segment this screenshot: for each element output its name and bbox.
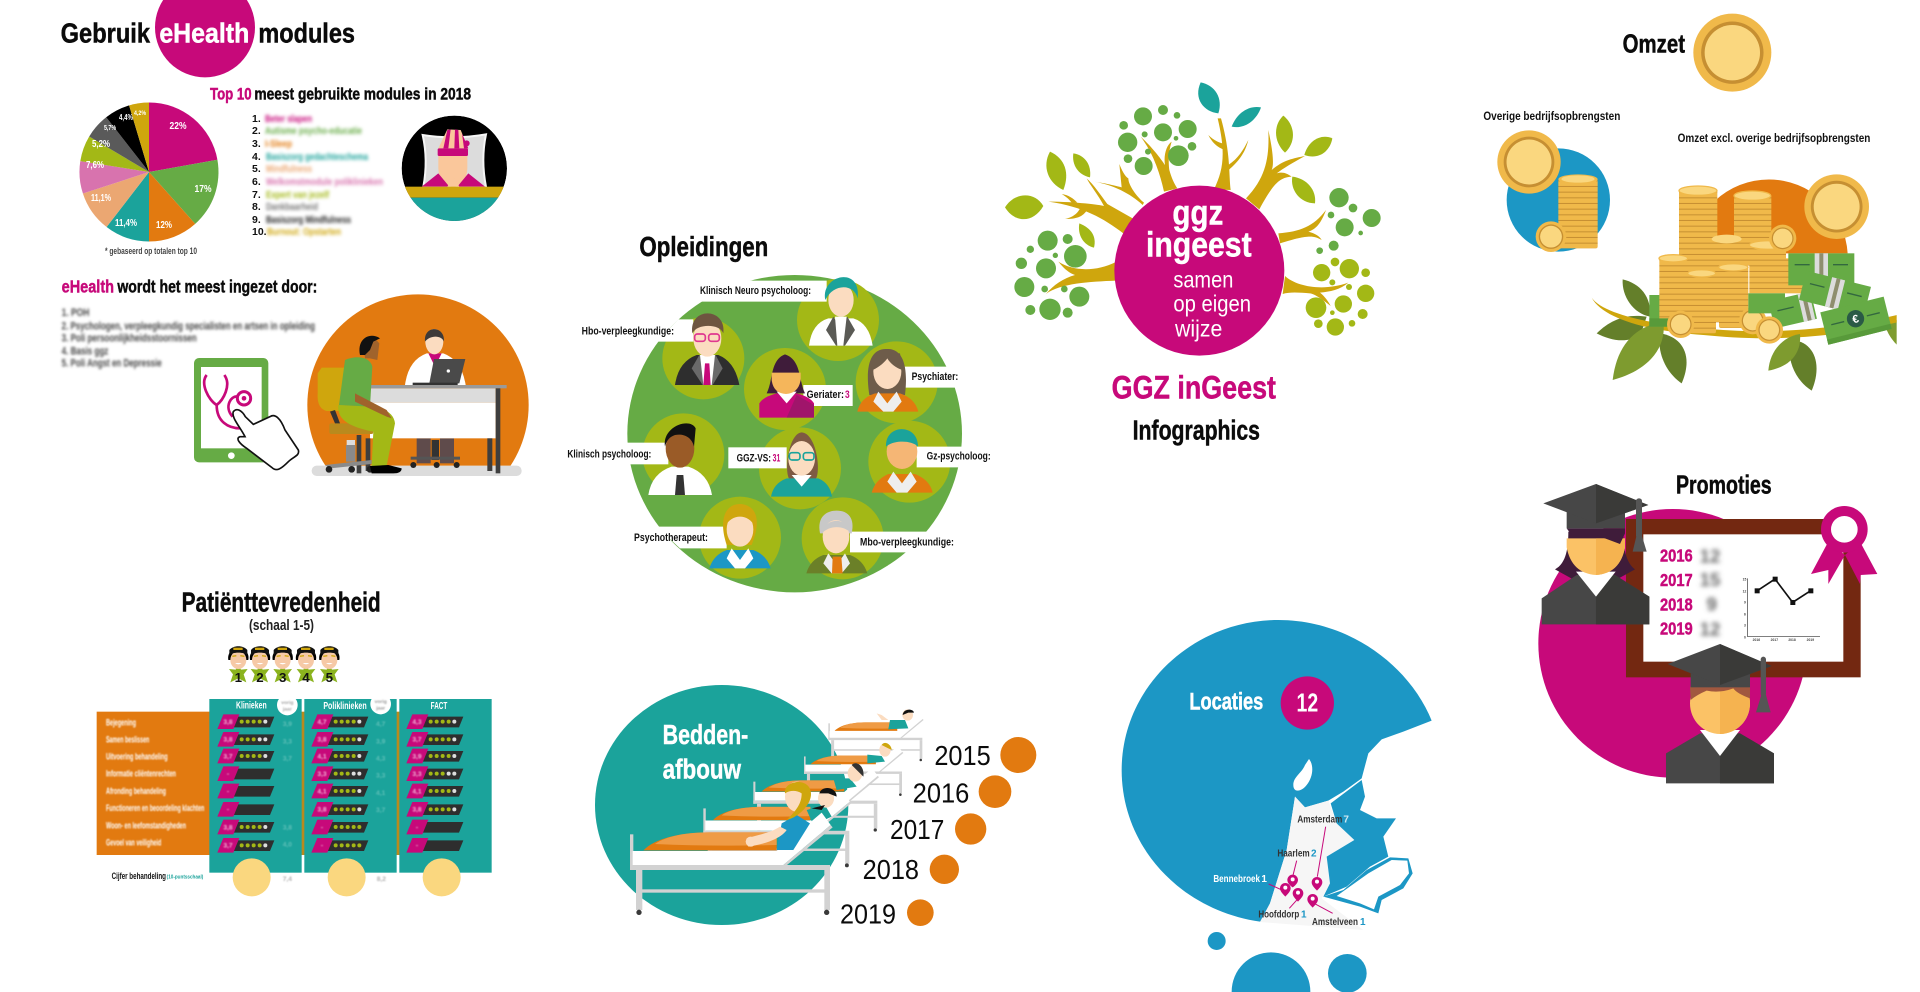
logo text: wijze: [1174, 316, 1222, 342]
panel: GGZ inGeest logo: [1005, 82, 1381, 445]
location labels: Haarlem: [1277, 848, 1310, 859]
line chart: 9: [1744, 601, 1746, 605]
smiley scale: 1: [235, 670, 243, 685]
big green circle: [627, 275, 962, 592]
blue circle: [1122, 620, 1432, 922]
map: [1260, 717, 1447, 935]
illustration: doctor and patient: [307, 294, 529, 476]
panel: eHealth usage: [60, 279, 529, 476]
logo text: samen: [1173, 266, 1233, 292]
label: cijfer behandeling: (10-puntsschaal): [167, 875, 203, 881]
row labels: Gevoel van veiligheid: [106, 837, 161, 847]
column: Poliklinieken: jaar: [375, 705, 385, 711]
list: top 10 modules: Welkomstmodule poliklinieken: [266, 176, 383, 188]
column: Poliklinieken: 3,7: [376, 807, 386, 814]
dots: [1014, 105, 1381, 320]
leaves: [1005, 116, 1332, 248]
person: psychiater: [857, 349, 918, 412]
smiley scale: 4: [302, 670, 310, 685]
title: Omzet: Omzet: [1623, 29, 1685, 59]
logo text: [1146, 193, 1252, 342]
column: FACT: -: [416, 843, 418, 850]
board: [1626, 519, 1861, 677]
column: Klinieken: 3,8: [223, 824, 233, 831]
year scale: [840, 737, 1036, 929]
smiley scale: [228, 646, 340, 685]
teal circle: [595, 685, 848, 925]
list: top 10 modules: Expert van jezelf: [266, 189, 329, 201]
title: Gebruik eHealth modules: [61, 18, 355, 49]
illustration: coins and money on branch: €: [1851, 313, 1861, 326]
list: top 10 modules: I-Sleep: [265, 138, 292, 150]
column: Klinieken: 3,8: [283, 824, 292, 831]
year scale: 2015: [934, 740, 991, 771]
column: Klinieken: 3,8: [223, 719, 233, 726]
subtitle: top 10: meest gebruikte modules in 2018: [254, 84, 471, 103]
title: Bedden-afbouw: Bedden-: [663, 719, 748, 750]
line chart: 3: [1744, 624, 1746, 628]
labels: Klinisch psycholoog:: [567, 448, 651, 460]
pie chart: top 10 modules: 22%: [170, 120, 187, 132]
year list: 2018: [1660, 595, 1693, 615]
location labels: Bennebroek: [1213, 874, 1260, 885]
count badge: [1281, 676, 1334, 730]
line chart: [1743, 577, 1820, 642]
panel: Promoties: [1538, 469, 1877, 783]
column: Klinieken: [209, 695, 302, 873]
list: departments: 5. Poli Angst en Depressie: [62, 358, 162, 370]
count badge: 12: [1296, 687, 1318, 717]
list: top 10 modules: 4.: [252, 151, 261, 163]
year list: 2016: [1660, 546, 1693, 566]
person: gz-psycholoog: [872, 429, 933, 493]
list: departments: 1. POH: [62, 307, 89, 319]
column: Klinieken: -: [227, 771, 229, 778]
column: Klinieken: 3,7: [223, 753, 233, 760]
title: Bedden-afbouw: [663, 719, 748, 784]
rosette: [1811, 506, 1877, 584]
column: Poliklinieken: -: [321, 824, 323, 831]
illustration: coins and money on branch: [1592, 174, 1903, 391]
column: Poliklinieken: 4,1: [317, 788, 327, 795]
graduate: woman: [1542, 484, 1649, 624]
row labels: Samen beslissen: [106, 734, 149, 744]
column: FACT: 4,1: [412, 788, 422, 795]
list: top 10 modules: Mindfulness: [266, 163, 312, 175]
column: FACT: 3,7: [412, 737, 422, 744]
column: Poliklinieken: 4,1: [376, 790, 386, 797]
labels: Hbo-verpleegkundige:: [582, 325, 674, 337]
labels: Psychiater:: [912, 371, 958, 383]
list: top 10 modules: 7.: [252, 189, 261, 201]
year scale: 2016: [913, 777, 969, 808]
column: Klinieken: jaar: [282, 706, 292, 712]
column: Poliklinieken: 4,3: [376, 755, 386, 762]
column: Poliklinieken: [304, 694, 397, 873]
blurred numbers: 12: [1700, 618, 1720, 639]
list: departments: [62, 307, 315, 370]
panel: Opleidingen: [567, 231, 991, 592]
graduate: man: [1666, 644, 1774, 783]
list: top 10 modules: 1.: [252, 113, 261, 125]
column: FACT: 4,3: [412, 719, 422, 726]
pie chart: top 10 modules: 11,4%: [115, 217, 137, 229]
column: Klinieken: vorig: [281, 700, 293, 706]
pie chart: top 10 modules: 5,7%: [104, 125, 117, 132]
location labels: 7: [1343, 815, 1349, 826]
location pins: [1280, 875, 1322, 908]
year list: 2019: [1660, 619, 1693, 639]
column: FACT: -: [416, 824, 418, 831]
column: FACT: 3,3: [412, 771, 422, 778]
column: Poliklinieken: 3,9: [376, 738, 386, 745]
panel: Omzet: [1483, 14, 1903, 391]
line chart: 6: [1744, 612, 1746, 616]
pie chart: top 10 modules: [79, 102, 218, 241]
column: Poliklinieken: 3,3: [376, 773, 386, 780]
label: omzet excl.: Omzet excl. overige bedrijfsopbrengsten: [1678, 131, 1870, 145]
column: Klinieken: -: [227, 788, 229, 795]
subtitle: top 10: Top 10: [210, 84, 252, 103]
list: top 10 modules: 5.: [252, 163, 261, 175]
title: Bedden-afbouw: afbouw: [663, 753, 741, 784]
labels: Psychotherapeut:: [634, 532, 708, 544]
column: FACT: FACT: [431, 701, 447, 712]
title: Promoties: Promoties: [1676, 469, 1772, 499]
logo text: ingeest: [1146, 226, 1252, 265]
panel: Locaties: [1122, 620, 1447, 992]
column: Poliklinieken: 4,1: [317, 753, 327, 760]
labels: Geriater:: [807, 389, 844, 401]
logo text: ggz: [1172, 193, 1223, 232]
list: top 10 modules: 9.: [252, 214, 261, 226]
column: Klinieken: 3,8: [223, 737, 233, 744]
location labels: [1213, 815, 1366, 928]
column: Klinieken: 4,0: [283, 842, 292, 849]
label: cijfer behandeling: Cijfer behandeling: [112, 871, 166, 881]
row labels: Bejegening: [106, 717, 136, 727]
row labels: Functioneren en beoordeling klachten: [106, 803, 204, 813]
year list: 2017: [1660, 570, 1693, 590]
column: Poliklinieken: 3,3: [317, 771, 327, 778]
column: Klinieken: Klinieken: [236, 700, 267, 711]
column: Poliklinieken: 4,7: [317, 719, 327, 726]
title: Locaties: Locaties: [1189, 688, 1263, 715]
pie chart: top 10 modules: 11,1%: [91, 192, 111, 204]
location labels: 2: [1311, 848, 1317, 859]
person: klinisch psycholoog: [648, 423, 712, 495]
labels: 31: [773, 452, 780, 464]
title circle: [155, 0, 255, 77]
column: Klinieken: 3,3: [283, 738, 292, 745]
list: top 10 modules: Beter slapen: [265, 113, 312, 125]
lime circles: [642, 279, 950, 579]
list: top 10 modules: 6.: [252, 176, 261, 188]
person: hbo-verpleegkundige: [675, 313, 739, 385]
previous year scores: [283, 876, 386, 883]
location labels: Amsterdam: [1297, 815, 1342, 826]
title: Opleidingen: Opleidingen: [639, 231, 768, 262]
connector lines: [1269, 827, 1333, 913]
column: Poliklinieken: 4,7: [376, 721, 386, 728]
year list: [1660, 546, 1693, 639]
magenta circle: [1538, 509, 1807, 778]
pie chart: top 10 modules: 5,2%: [92, 138, 110, 150]
white label bands: [570, 281, 963, 552]
line chart: 12: [1743, 589, 1747, 593]
list: top 10 modules: Burnout: Opstarten: [267, 226, 341, 238]
line chart: 2019: [1807, 638, 1814, 642]
decorative dots: [1208, 932, 1367, 992]
score circles: [233, 858, 461, 896]
tree branches: [1046, 118, 1348, 306]
panel: Patiënttevredenheid: [97, 587, 492, 896]
panel: eHealth modules: [61, 0, 471, 103]
title: Gebruik eHealth modules: modules: [258, 18, 355, 49]
heading: eHealth usage: [62, 276, 317, 296]
illustration: coins on blue circle: [1497, 130, 1610, 252]
labels: 3: [845, 389, 850, 401]
line chart: 2018: [1788, 638, 1796, 642]
list: top 10 modules: Autisme psycho-educatie: [265, 125, 362, 137]
beds: [630, 709, 924, 915]
year scale: 2017: [890, 814, 944, 845]
icon: sleeping person: [400, 116, 510, 224]
title: GGZ inGeest: GGZ inGeest: [1112, 368, 1276, 405]
blurred numbers: [1700, 545, 1720, 639]
list: departments: 2. Psychologen, verpleegkundig specialisten en artsen in opleiding: [62, 320, 315, 332]
previous year scores: 7,4: [283, 876, 292, 883]
list: top 10 modules: 8.: [252, 201, 261, 213]
person: mbo-verpleegkundige: [806, 511, 867, 573]
column: Klinieken: 3,9: [283, 721, 292, 728]
list: top 10 modules: 3.: [252, 138, 261, 150]
column: Poliklinieken: 3,8: [317, 807, 327, 814]
column: FACT: [399, 699, 492, 873]
smiley scale: 5: [326, 670, 334, 685]
panel: Beddenafbouw: [595, 685, 1036, 929]
row labels: [106, 717, 204, 847]
person: psychotherapeut: [709, 504, 771, 568]
column: Klinieken: 3,7: [283, 755, 292, 762]
pie chart: top 10 modules: 17%: [194, 183, 212, 195]
heading: eHealth usage: eHealth: [62, 276, 114, 296]
title: Gebruik eHealth modules: Gebruik: [61, 18, 150, 49]
location labels: Amstelveen: [1312, 917, 1358, 928]
subtitle: schaal: (schaal 1-5): [249, 618, 314, 634]
previous year scores: 8,2: [377, 876, 386, 883]
person: geriater: [759, 354, 814, 418]
year scale: 2018: [863, 854, 919, 885]
row labels: Uitvoering behandeling: [106, 752, 168, 762]
location labels: 1: [1360, 917, 1366, 928]
list: top 10 modules: Dankbaarheid: [266, 201, 318, 213]
location labels: 1: [1261, 874, 1267, 885]
pie chart: top 10 modules: 4,4%: [119, 113, 133, 122]
list: departments: 3. Poli persoonlijkheidsstoornissen: [62, 333, 197, 345]
column: Poliklinieken: Poliklinieken: [323, 701, 367, 712]
label: overige bedrijfsopbrengsten: Overige bedrijfsopbrengsten: [1483, 109, 1620, 123]
labels: [567, 285, 991, 548]
smiley scale: 2: [256, 670, 264, 685]
list: top 10 modules: Basiszorg Mindfulness: [266, 214, 351, 226]
orange row header: [97, 712, 210, 855]
logo text: op eigen: [1173, 291, 1251, 317]
title: Patiënttevredenheid: [182, 587, 381, 618]
magenta circle: [1114, 186, 1284, 356]
blurred numbers: 15: [1700, 569, 1720, 590]
column: FACT: 3,8: [412, 807, 422, 814]
footnote: * gebaseerd op totalen top 10: [105, 246, 197, 257]
column: Klinieken: -: [227, 807, 229, 814]
labels: Klinisch Neuro psycholoog:: [700, 285, 811, 297]
pie chart: top 10 modules: 12%: [156, 219, 173, 231]
pie chart: top 10 modules: 7,6%: [86, 159, 104, 171]
column: Poliklinieken: 3,8: [317, 737, 327, 744]
line chart: 2017: [1771, 638, 1778, 642]
column separators: [300, 712, 401, 855]
column: Poliklinieken: vorig: [375, 699, 387, 705]
heading: eHealth usage: wordt het meest ingezet door:: [117, 276, 317, 296]
blurred numbers: 12: [1700, 545, 1720, 566]
list: top 10 modules: 10.: [252, 226, 267, 238]
column: FACT: 3,9: [412, 753, 422, 760]
title: Gebruik eHealth modules: eHealth: [159, 18, 249, 49]
column: Klinieken: 3,7: [223, 843, 233, 850]
icon: tablet with stethoscope: [194, 358, 299, 470]
list: top 10 modules: Basiszorg gedachteschema: [266, 151, 368, 163]
row labels: Informatie cliëntenrechten: [106, 769, 176, 779]
column: Poliklinieken: -: [321, 843, 323, 850]
labels: Mbo-verpleegkundige:: [860, 536, 954, 548]
person: ggz-vs: [771, 432, 832, 497]
location labels: Hoofddorp: [1258, 910, 1299, 921]
smiley scale: 3: [279, 670, 286, 685]
large coin: [1693, 14, 1771, 92]
list: top 10 modules: [252, 113, 383, 238]
list: top 10 modules: 2.: [252, 125, 261, 137]
line chart: 0: [1744, 635, 1746, 639]
line chart: 2016: [1753, 638, 1760, 642]
location labels: 1: [1301, 910, 1307, 921]
person: klinisch neuro psycholoog: [809, 277, 873, 346]
labels: GGZ-VS:: [737, 452, 771, 464]
pie chart: top 10 modules: 4,2%: [134, 111, 147, 117]
row labels: Afronding behandeling: [106, 786, 166, 796]
row labels: Woon- en leefomstandigheden: [106, 820, 186, 830]
list: departments: 4. Basis ggz: [62, 345, 109, 357]
blurred numbers: 9: [1706, 594, 1717, 615]
year scale: 2019: [840, 898, 896, 929]
line chart: 15: [1743, 578, 1747, 582]
subtitle: Infographics: Infographics: [1133, 414, 1260, 445]
labels: Gz-psycholoog:: [927, 451, 991, 463]
